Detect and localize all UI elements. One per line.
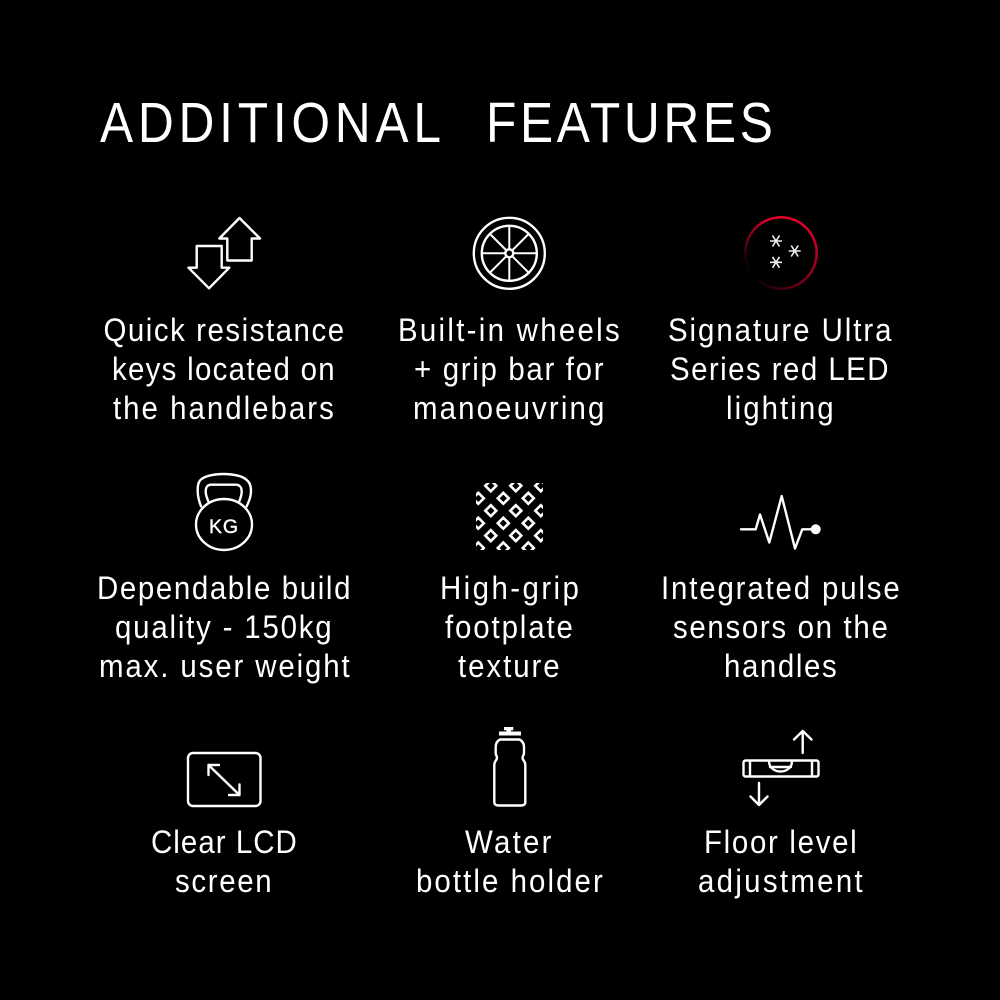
label: LCD screen: Clear LCD bbox=[151, 824, 297, 860]
label: red LED lighting: lighting bbox=[726, 390, 834, 426]
label: pulse sensors: sensors on the bbox=[673, 609, 888, 645]
label: high-grip footplate bbox=[440, 570, 579, 684]
icon: footplate texture bbox=[476, 483, 543, 550]
label: quick resistance keys: Quick resistance bbox=[104, 312, 344, 348]
feature: build quality bbox=[97, 474, 350, 684]
label: build quality: quality - 150kg bbox=[115, 609, 332, 645]
label: built-in wheels: Built-in wheels bbox=[398, 312, 620, 348]
label: quick resistance keys: keys located on bbox=[112, 351, 335, 387]
label: high-grip footplate: High-grip bbox=[440, 570, 579, 606]
icon: wheel bbox=[474, 218, 545, 289]
label: floor level adjustment bbox=[698, 824, 863, 899]
label: pulse sensors: handles bbox=[724, 648, 837, 684]
label: LCD screen bbox=[151, 824, 297, 899]
feature: built-in wheels bbox=[398, 218, 620, 426]
label: build quality: max. user weight bbox=[99, 648, 350, 684]
label: built-in wheels bbox=[398, 312, 620, 426]
feature: floor level adjustment bbox=[698, 731, 863, 899]
label: high-grip footplate: texture bbox=[458, 648, 560, 684]
icon: LCD screen bbox=[188, 753, 260, 806]
label: build quality bbox=[97, 570, 350, 684]
label: pulse sensors: Integrated pulse bbox=[661, 570, 900, 606]
label: pulse sensors bbox=[661, 570, 900, 684]
label: quick resistance keys bbox=[104, 312, 344, 426]
title bbox=[100, 92, 773, 155]
icon: kettlebell: KG bbox=[209, 516, 238, 538]
label: high-grip footplate: footplate bbox=[445, 609, 573, 645]
label: built-in wheels: + grip bar for bbox=[414, 351, 604, 387]
label: quick resistance keys: the handlebars bbox=[113, 390, 334, 426]
feature: high-grip footplate bbox=[440, 480, 579, 684]
feature: quick resistance keys bbox=[104, 218, 344, 426]
title: ADDITIONAL bbox=[100, 92, 441, 155]
feature: water bottle holder bbox=[416, 727, 603, 899]
feature: red LED lighting bbox=[668, 216, 892, 426]
label: red LED lighting: Series red LED bbox=[670, 351, 889, 387]
icon: water bottle bbox=[494, 727, 525, 806]
label: build quality: Dependable build bbox=[97, 570, 350, 606]
label: water bottle holder bbox=[416, 824, 603, 899]
label: red LED lighting: Signature Ultra bbox=[668, 312, 892, 348]
label: red LED lighting bbox=[668, 312, 892, 426]
feature: LCD screen bbox=[151, 753, 297, 899]
label: floor level adjustment: adjustment bbox=[698, 863, 863, 899]
feature: pulse sensors bbox=[661, 496, 900, 684]
label: built-in wheels: manoeuvring bbox=[413, 390, 604, 426]
title: FEATURES bbox=[486, 92, 773, 155]
label: floor level adjustment: Floor level bbox=[704, 824, 857, 860]
label: water bottle holder: Water bbox=[465, 824, 551, 860]
icon: up and down arrows bbox=[188, 218, 260, 288]
label: water bottle holder: bottle holder bbox=[416, 863, 603, 899]
icon: spirit level with arrows bbox=[744, 731, 818, 805]
label: LCD screen: screen bbox=[175, 863, 272, 899]
icon: red LED ring with stars bbox=[744, 216, 818, 290]
icon: pulse line bbox=[741, 496, 821, 548]
icon: kettlebell bbox=[196, 474, 252, 550]
